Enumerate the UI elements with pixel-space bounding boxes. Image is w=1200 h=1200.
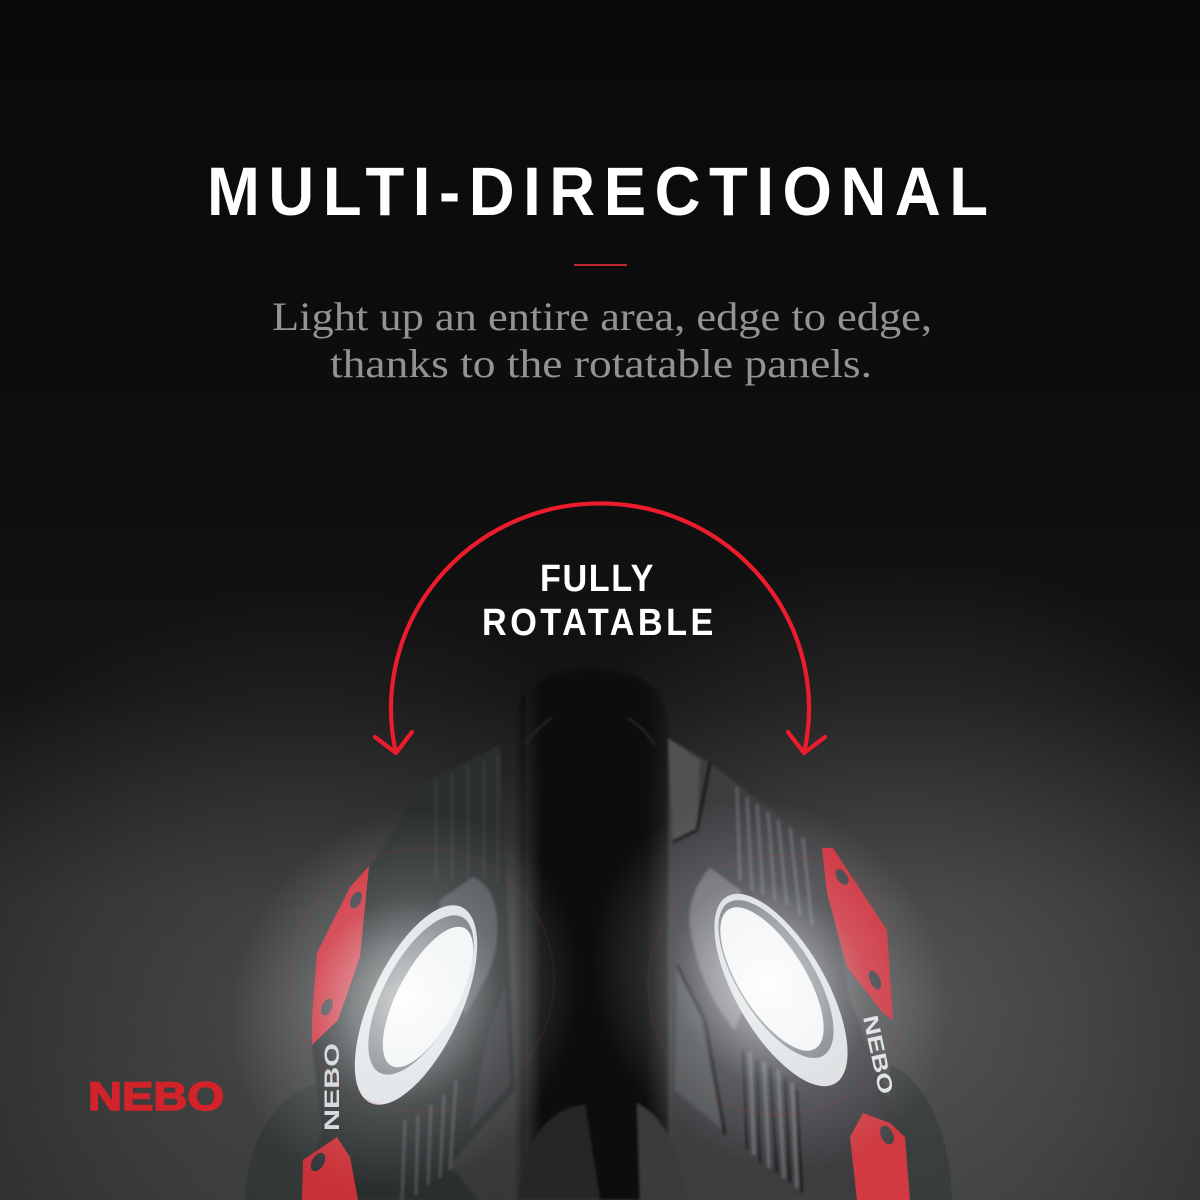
heat sink fins top left	[436, 755, 498, 885]
side panel left	[470, 985, 510, 1130]
red divider	[574, 264, 627, 266]
lamp glow left	[169, 751, 641, 1200]
rotation arrow	[375, 503, 825, 753]
bottom gray panel right	[675, 970, 723, 1130]
rotation label: ROTATABLE	[482, 600, 713, 643]
lens housing right	[690, 868, 760, 1030]
left lamp panel	[304, 745, 515, 1200]
right lamp panel	[668, 738, 910, 1200]
right red plate top	[822, 848, 893, 1020]
rotation label: FULLY	[540, 556, 653, 599]
title: MULTI-DIRECTIONAL	[207, 154, 988, 231]
lens flare rings	[290, 848, 908, 1115]
panel grooves right	[673, 763, 725, 1135]
right panel logo: NEBO	[858, 1013, 897, 1096]
heat sink fins bottom right	[743, 1050, 802, 1193]
left red plate bottom	[302, 1137, 358, 1200]
fog of light	[0, 550, 1200, 1200]
right lens ring	[688, 874, 874, 1106]
flashlight	[302, 670, 910, 1200]
lamp glow right	[519, 728, 1021, 1200]
brand logo: NEBO	[88, 1075, 224, 1119]
subtitle: Light up an entire area, edge to edge,	[272, 294, 932, 339]
heat sink fins bottom left	[402, 1080, 456, 1200]
subtitle	[272, 294, 932, 386]
central handle	[514, 670, 684, 1200]
left red plate top	[312, 866, 369, 1045]
lens housing left	[440, 877, 497, 1015]
left lens ring	[330, 888, 502, 1122]
left panel logo: NEBO	[321, 1043, 344, 1131]
heat sink fins top right	[737, 787, 812, 925]
right red plate bottom	[850, 1113, 910, 1200]
rotation label	[482, 556, 713, 643]
top gray panel right	[668, 738, 700, 840]
subtitle: thanks to the rotatable panels.	[330, 341, 872, 386]
